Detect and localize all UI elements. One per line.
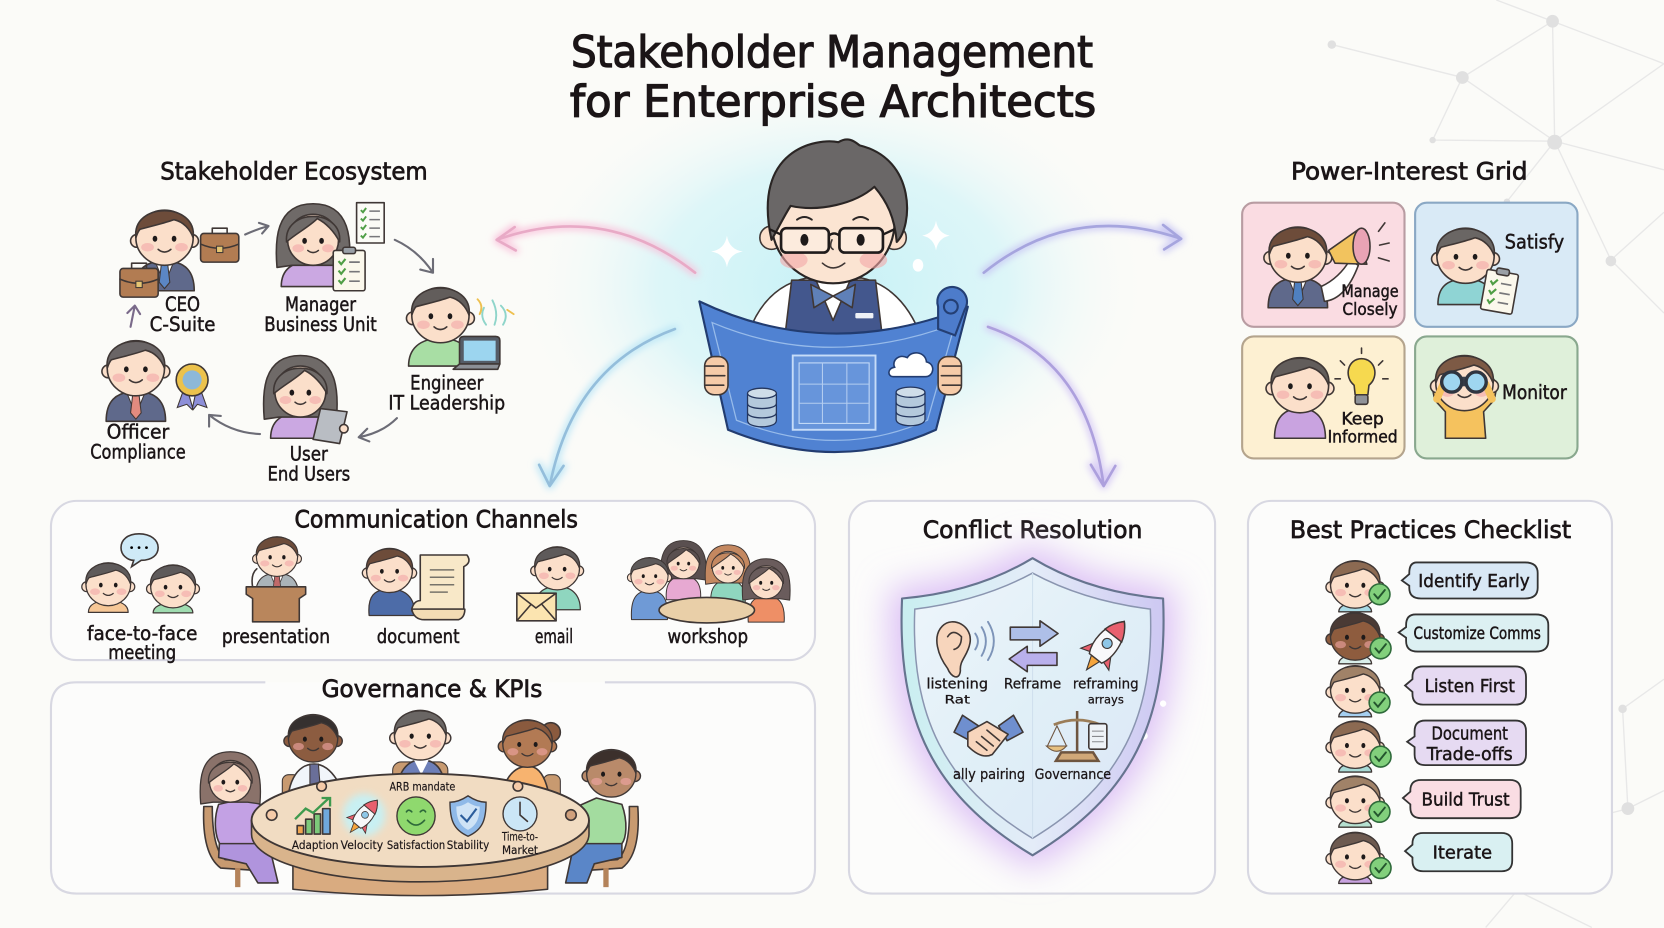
arrow: user to officer (209, 415, 260, 434)
icon: handshake: ally pairing (953, 767, 1025, 783)
decorative network: bottom right (1486, 679, 1664, 927)
practice: document trade-offs: Trade-offs (1426, 744, 1513, 765)
quadrant: keep informed (1242, 336, 1405, 458)
arrow: centre to communication channels (539, 329, 675, 486)
shield (902, 558, 1164, 855)
channel: email (517, 547, 584, 648)
KPI: satisfaction: Satisfaction (387, 839, 445, 852)
heading: Power-Interest Grid (1291, 156, 1528, 185)
quadrant: manage closely (1242, 203, 1405, 327)
stakeholder: manager: Manager (285, 293, 356, 316)
practice: customize comms: Customize Comms (1414, 624, 1541, 643)
channel: presentation (222, 537, 330, 648)
KPI: adoption (292, 798, 339, 852)
icon: ear listening: listening (926, 677, 988, 693)
icon: scales and document: Governance (1035, 767, 1111, 783)
KPI: stability (447, 796, 490, 852)
KPI: velocity: Velocity (341, 839, 384, 852)
arrow: manager to engineer (395, 240, 433, 273)
channel: face-to-face meeting: face-to-face (87, 622, 197, 645)
practice: listen first: Listen First (1425, 676, 1515, 697)
heading: Stakeholder Ecosystem (160, 156, 428, 185)
panel: best practices checklist (1248, 501, 1612, 894)
heading: Best Practices Checklist (1290, 515, 1571, 544)
icon: rocket: arrays (1088, 693, 1124, 707)
stakeholder: CEO (120, 210, 239, 336)
heading: Governance & KPIs (322, 674, 542, 703)
decorative network: top right (1328, 0, 1664, 313)
board member: fourth (498, 720, 560, 826)
quadrant: satisfy: Satisfy (1505, 230, 1564, 253)
arrow: engineer to user (359, 418, 397, 441)
channel: document (362, 548, 469, 648)
icon: rocket (1073, 611, 1139, 707)
arrow: centre to power-interest grid (984, 225, 1181, 273)
quadrant: keep informed: Informed (1328, 428, 1398, 447)
channel: face-to-face meeting: meeting (108, 641, 176, 664)
shield glow (902, 558, 1164, 855)
stakeholder: user (264, 355, 350, 486)
panel: communication channels (51, 501, 815, 664)
practice: document trade-offs (1326, 721, 1526, 772)
title (570, 28, 1096, 128)
stakeholder: user: User (290, 443, 328, 466)
stakeholder: officer (90, 341, 208, 463)
hands on table (266, 782, 576, 820)
stakeholder: engineer: Engineer (410, 371, 484, 394)
board member: right (566, 750, 640, 887)
quadrant: satisfy (1415, 203, 1577, 327)
architect body (749, 278, 919, 342)
channel: workshop (627, 541, 790, 648)
stakeholder: CEO: CEO (165, 293, 200, 316)
stakeholder: engineer (388, 288, 514, 415)
quadrant: manage closely: Manage (1341, 282, 1399, 301)
hands (705, 357, 961, 395)
governance board with table (200, 710, 640, 896)
panel: conflict resolution (849, 0, 1215, 894)
icon: scales and document (1035, 711, 1111, 783)
practice: document trade-offs: Document (1432, 724, 1508, 745)
heading: Conflict Resolution (923, 515, 1142, 544)
icon: ear listening (926, 622, 994, 707)
panel: governance and KPIs (51, 674, 815, 896)
icon: reframe arrows: Reframe (1004, 677, 1061, 693)
section: stakeholder ecosystem (90, 156, 514, 486)
arrow: centre to conflict resolution (988, 327, 1115, 486)
channel: email: email (535, 625, 573, 648)
icon: reframe arrows (1004, 621, 1061, 693)
practice: iterate: Iterate (1433, 842, 1492, 863)
stakeholder: officer: Officer (107, 420, 169, 443)
practice: iterate (1326, 832, 1512, 883)
practice: identify early: Identify Early (1418, 571, 1530, 592)
sparkles (711, 221, 950, 272)
title: for Enterprise Architects (570, 78, 1096, 128)
practice: identify early (1326, 561, 1538, 612)
quadrant: keep informed: Keep (1341, 409, 1384, 428)
icon: ear listening: Rat (944, 693, 971, 707)
arrow: centre to stakeholder ecosystem (497, 226, 695, 273)
stakeholder: manager: Business Unit (264, 313, 377, 336)
channel: workshop: workshop (668, 625, 748, 648)
stakeholder: officer: Compliance (90, 440, 186, 463)
stakeholder: CEO: C-Suite (150, 313, 215, 336)
board member: left (200, 752, 278, 887)
channel: presentation: presentation (222, 625, 330, 648)
channel: document: document (377, 625, 460, 648)
practice: customize comms (1326, 613, 1548, 664)
KPI: adoption: Adaption (292, 839, 339, 852)
stakeholder: engineer: IT Leadership (388, 392, 505, 415)
table caption: ARB mandate (389, 781, 455, 794)
central architect with blueprint (699, 139, 968, 452)
KPI: time-to-market: Time-to- (501, 830, 538, 843)
KPI: velocity (341, 792, 387, 852)
icon: rocket: reframing (1073, 677, 1139, 693)
glow sparkles (937, 0, 1196, 740)
quadrant: monitor: Monitor (1502, 381, 1567, 404)
quadrant: manage closely: Closely (1342, 300, 1398, 319)
quadrant: monitor (1415, 336, 1577, 458)
arrow: CEO to manager (245, 223, 269, 235)
board member: second (282, 715, 350, 819)
central glow (515, 69, 1151, 504)
section: power-interest grid (1242, 156, 1577, 458)
KPI: satisfaction (387, 797, 445, 852)
title: Stakeholder Management (571, 28, 1093, 78)
stakeholder: manager (264, 203, 384, 336)
arrow: officer to CEO (127, 306, 140, 327)
blueprint sheet (699, 287, 968, 452)
table (252, 774, 589, 896)
practice: listen first (1326, 666, 1526, 717)
channel: face-to-face meeting (82, 534, 199, 664)
KPI: time-to-market: Market (502, 844, 539, 857)
heading: Communication Channels (295, 504, 578, 533)
KPI: time-to-market (501, 797, 539, 857)
practice: build trust (1326, 776, 1521, 827)
practice: build trust: Build Trust (1421, 789, 1510, 810)
architect head (760, 139, 907, 283)
stakeholder: user: End Users (267, 463, 350, 486)
KPI: stability: Stability (447, 839, 490, 852)
board member: third (390, 710, 451, 796)
icon: handshake (953, 715, 1025, 783)
